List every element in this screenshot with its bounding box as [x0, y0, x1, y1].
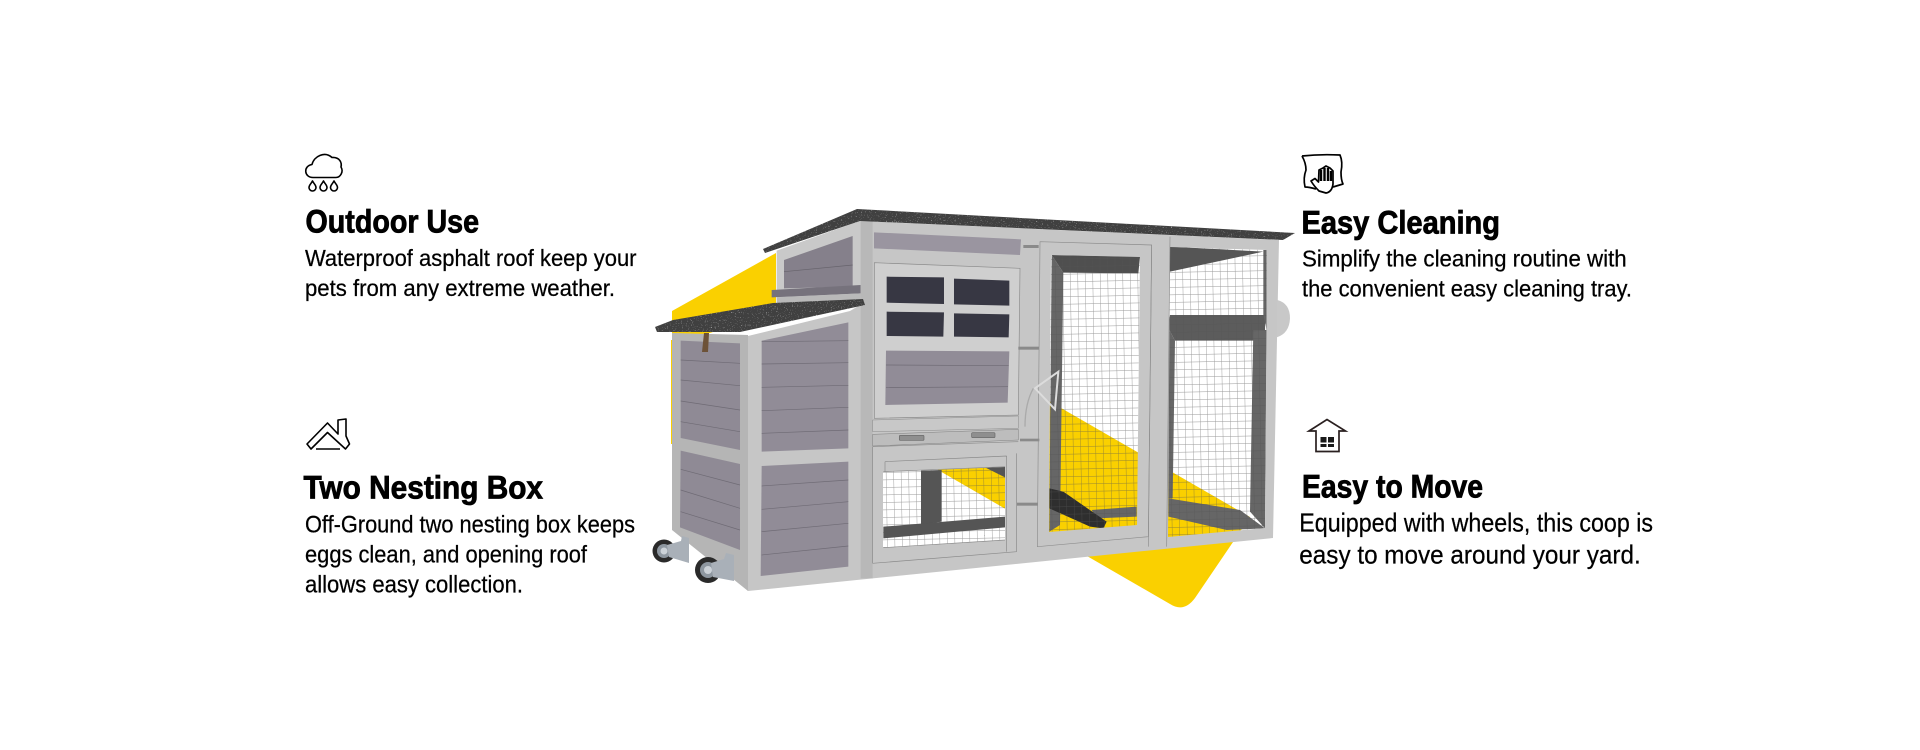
text: easy to move description: easy to move around your yard.: [1299, 539, 1641, 569]
door frame details: [1025, 237, 1290, 547]
text: two nesting box description: [305, 512, 635, 599]
icon: cloth and hand: [1302, 155, 1343, 193]
icon: rain cloud: [306, 155, 342, 191]
coop side wall: [672, 333, 748, 591]
text: easy to move description: Equipped with wheels, this coop is: [1299, 508, 1653, 538]
yellow background shape: [671, 253, 1250, 607]
text: easy cleaning description: Simplify the cleaning routine with: [1302, 246, 1627, 272]
text: outdoor use description: pets from any extreme weather.: [305, 275, 615, 301]
upper roof: [763, 209, 1295, 253]
heading: outdoor use: Outdoor Use: [306, 204, 479, 240]
text: two nesting box description: Off-Ground two nesting box keeps: [305, 512, 635, 539]
illustration: chicken coop: [652, 209, 1295, 591]
icon: house: [1309, 420, 1346, 452]
panel: outdoor use: [305, 155, 637, 301]
text: easy cleaning description: [1302, 246, 1632, 302]
wheel: rear: [652, 536, 689, 563]
coop main frame: [748, 221, 1279, 591]
text: outdoor use description: [305, 245, 637, 301]
text: two nesting box description: eggs clean, and opening roof: [305, 542, 587, 569]
wire mesh panels: [883, 247, 1267, 548]
panel: two nesting box: [304, 419, 635, 599]
lower roof: [655, 299, 865, 332]
heading: two nesting box: Two Nesting Box: [304, 469, 543, 505]
heading: easy cleaning: Easy Cleaning: [1302, 204, 1500, 240]
heading: easy to move: Easy to Move: [1302, 469, 1483, 505]
text: outdoor use description: Waterproof asphalt roof keep your: [305, 245, 637, 271]
text: easy cleaning description: the convenient easy cleaning tray.: [1302, 276, 1632, 302]
panel: easy cleaning: [1302, 155, 1632, 302]
wheels: [652, 536, 734, 583]
icon: roof: [307, 419, 350, 449]
text: two nesting box description: allows easy collection.: [305, 572, 523, 599]
panel: easy to move: [1299, 420, 1653, 569]
coop front panels: [761, 220, 1039, 578]
text: easy to move description: [1299, 508, 1653, 569]
roof latch: [702, 333, 709, 352]
coop interior seen through mesh: [883, 247, 1267, 538]
wheel: front: [695, 553, 734, 583]
